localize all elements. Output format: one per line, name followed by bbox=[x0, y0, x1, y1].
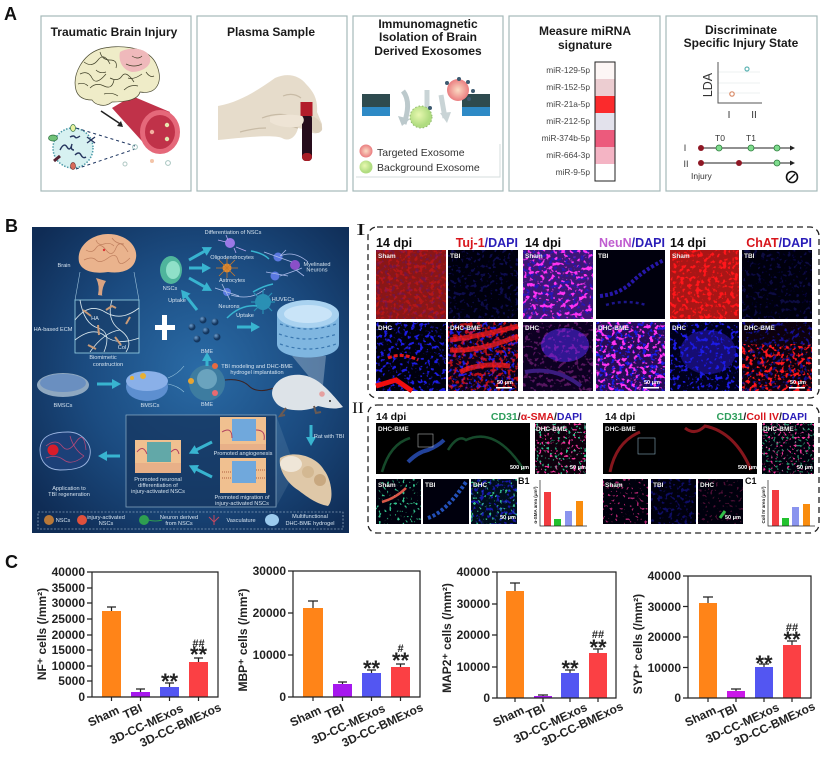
micrograph: DHC alpha-SMA: DHC bbox=[473, 482, 487, 489]
icon: brain with vessel and exosome bbox=[48, 47, 180, 170]
chart: SYP+ cells: 0 bbox=[674, 691, 681, 705]
panel label: B: B bbox=[5, 216, 18, 236]
chart: MBP+ cells: 10000 bbox=[253, 648, 286, 662]
label: C1: C1 bbox=[745, 476, 757, 486]
labels: schematic text: Myelinated bbox=[303, 262, 331, 268]
scatter plot: LDA bbox=[701, 62, 762, 121]
micrograph: ChAT Sham: Sham bbox=[672, 253, 690, 260]
heatmap: miRNA: miR-212-5p bbox=[546, 116, 590, 126]
heatmap: miRNA: miR-664-3p bbox=[546, 150, 590, 160]
chart: MAP2+ cells: 10000 bbox=[457, 660, 490, 674]
micrograph: TBI alpha-SMA bbox=[423, 479, 469, 524]
labels: schematic text: BME bbox=[201, 402, 213, 408]
chart: MAP2+ cells: MAP2⁺ cells (/mm²) bbox=[440, 583, 454, 693]
chart: MBP+ cells: ** bbox=[363, 656, 380, 681]
micrograph: DHC alpha-SMA bbox=[471, 479, 517, 524]
chart: SYP+ cells: ** bbox=[783, 627, 801, 652]
chart: NF+ cells: 25000 bbox=[52, 612, 85, 626]
chart: NF+ cells: 15000 bbox=[52, 643, 85, 657]
timeline: injury states: T1 bbox=[746, 133, 756, 143]
labels: schematic text: differentiation of bbox=[138, 483, 178, 489]
heading: NeuN bbox=[525, 236, 665, 250]
timeline: injury states: II bbox=[683, 159, 689, 169]
heading: Tuj-1: Tuj-1/DAPI bbox=[456, 236, 518, 250]
heatmap: miRNA: miR-21a-5p bbox=[546, 99, 590, 109]
box: Measure miRNA signature: Measure miRNA bbox=[539, 24, 631, 38]
timeline: injury states bbox=[683, 133, 798, 182]
micrograph: wide DHC-BME alpha-SMA: DHC-BME bbox=[378, 426, 409, 433]
box: Plasma Sample: Plasma Sample bbox=[227, 25, 315, 39]
chart: NF+ cells: 10000 bbox=[52, 659, 85, 673]
heading: Coll IV: CD31/Coll IV/DAPI bbox=[717, 411, 807, 423]
micrograph: TBI Coll IV: TBI bbox=[653, 482, 664, 489]
chart: MAP2+ cells: ## bbox=[592, 629, 604, 641]
illustration: BMSC dish and BME bbox=[37, 363, 274, 401]
chart: MBP+ cells: MBP⁺ cells (/mm²) bbox=[236, 588, 250, 692]
labels: schematic text: Oligodendrocytes bbox=[210, 255, 254, 261]
labels: schematic text: NSCs bbox=[163, 286, 178, 292]
heading: alpha-SMA: CD31/α-SMA/DAPI bbox=[491, 411, 582, 423]
chart: MAP2+ cells: 40000 bbox=[457, 565, 490, 579]
micrograph: DHC Coll IV: 50 μm bbox=[725, 515, 741, 521]
micrograph: zoom DHC-BME Coll IV: DHC-BME bbox=[763, 426, 794, 433]
micrograph: zoom DHC-BME alpha-SMA bbox=[535, 423, 586, 474]
chart: NF+ cells: 30000 bbox=[52, 596, 85, 610]
scatter plot: LDA: I bbox=[728, 110, 730, 121]
micrograph: NeuN Sham: Sham bbox=[525, 253, 543, 260]
chart: SYP+ cells: ** bbox=[755, 651, 773, 676]
panel I: 14 dpi neuronal staining bbox=[368, 227, 819, 398]
chart: MBP+ cells: 3D-CC-BMExos bbox=[340, 700, 426, 750]
legend: exosome types: Background Exosome bbox=[377, 162, 480, 174]
illustration: brain and ECM bbox=[75, 234, 139, 353]
labels: schematic text: Col bbox=[118, 345, 126, 351]
chart: MBP+ cells: 20000 bbox=[253, 606, 286, 620]
icon: plus sign bbox=[155, 315, 175, 340]
chart: SYP+ cells: TBI bbox=[716, 701, 739, 722]
micrograph: DHC Coll IV bbox=[698, 479, 743, 524]
roman numeral I: I bbox=[356, 221, 366, 239]
box: Discriminate Specific Injury State: Discriminate bbox=[705, 23, 777, 37]
labels: schematic text: Uptake bbox=[236, 313, 254, 319]
box: Measure miRNA signature: signature bbox=[558, 38, 612, 52]
micrograph: ChAT DHC-BME: DHC-BME bbox=[744, 325, 775, 332]
chart: SYP+ cells: 40000 bbox=[648, 569, 681, 583]
labels: schematic text: BME bbox=[201, 349, 213, 355]
chart: MBP+ cells: 3D-CC-MExos bbox=[309, 701, 388, 747]
chart: SYP+ cells bbox=[631, 569, 818, 749]
micrograph: wide DHC-BME Coll IV bbox=[603, 423, 757, 474]
legend: schematic key: NSCs bbox=[99, 521, 114, 527]
labels: schematic text bbox=[34, 230, 345, 507]
panel A: exosome workflow bbox=[41, 16, 817, 191]
micrograph: Tuj-1 DHC: DHC bbox=[378, 325, 392, 332]
micrograph: Tuj-1 Sham: Sham bbox=[378, 253, 396, 260]
labels: schematic text: HA bbox=[91, 316, 99, 322]
scatter plot: LDA: LDA bbox=[701, 72, 715, 97]
illustration: rat bbox=[272, 375, 343, 416]
micrograph: Sham Coll IV bbox=[603, 479, 648, 524]
diagram: magnets and exosomes bbox=[362, 77, 490, 128]
bar chart: alpha-SMA area bbox=[533, 480, 587, 526]
panel II: 14 dpi vascular staining bbox=[368, 405, 819, 533]
chart: NF+ cells: 35000 bbox=[52, 581, 85, 595]
labels: schematic text: BMSCs bbox=[54, 403, 73, 409]
box: Traumatic Brain Injury bbox=[41, 16, 191, 191]
chart: MAP2+ cells: TBI bbox=[524, 701, 547, 722]
chart: MAP2+ cells: 0 bbox=[483, 691, 490, 705]
bar chart: Coll IV area: Coll IV area (μm²) bbox=[761, 486, 766, 524]
legend: schematic key: DHC-BME hydrogel bbox=[285, 521, 335, 527]
illustration: BME particles bbox=[188, 316, 220, 342]
micrograph: DHC alpha-SMA: 50 μm bbox=[500, 515, 516, 521]
panel label: C: C bbox=[5, 552, 18, 572]
micrograph: ChAT DHC-BME bbox=[742, 322, 812, 391]
inset: promoted outcomes bbox=[126, 415, 296, 507]
labels: schematic text: Brain bbox=[57, 263, 71, 269]
labels: schematic text: Differentiation of NSCs bbox=[205, 230, 262, 236]
heading: NeuN: 14 dpi bbox=[525, 236, 561, 250]
micrograph: NeuN DHC-BME: DHC-BME bbox=[598, 325, 629, 332]
micrograph: NeuN DHC bbox=[523, 322, 593, 391]
labels: schematic text: Neurons bbox=[218, 304, 240, 310]
illustration: regenerated brain bbox=[40, 432, 90, 470]
legend: schematic key bbox=[38, 512, 343, 529]
legend: schematic key: injury-activated bbox=[87, 515, 125, 521]
panel label: A: A bbox=[4, 4, 17, 24]
micrograph: Sham alpha-SMA: Sham bbox=[378, 482, 396, 489]
labels: schematic text: TBI regeneration bbox=[48, 492, 90, 498]
chart: SYP+ cells: Sham bbox=[683, 703, 718, 730]
micrograph: NeuN Sham bbox=[523, 250, 593, 319]
labels: schematic text: Promoted migration of bbox=[214, 495, 270, 501]
chart: NF+ cells: ** bbox=[190, 642, 207, 667]
micrograph: NeuN DHC: DHC bbox=[525, 325, 539, 332]
panel B: hydrogel schematic bbox=[32, 227, 349, 533]
chart: MAP2+ cells: 3D-CC-MExos bbox=[511, 700, 590, 746]
chart: SYP+ cells: 30000 bbox=[648, 600, 681, 614]
timeline: injury states: T0 bbox=[715, 133, 725, 143]
legend: schematic key: Multifunctional bbox=[292, 514, 328, 520]
labels: schematic text: HUVECs bbox=[272, 297, 294, 303]
illustration: DHC-BME hydrogel bbox=[277, 300, 339, 385]
chart: MBP+ cells: ** bbox=[392, 648, 409, 673]
scatter plot: LDA: II bbox=[751, 110, 757, 121]
chart: MBP+ cells: # bbox=[397, 643, 404, 655]
chart: SYP+ cells: 3D-CC-MExos bbox=[703, 700, 782, 746]
heading: ChAT bbox=[670, 236, 812, 250]
chart: NF+ cells: ## bbox=[192, 638, 205, 650]
chart: SYP+ cells: 20000 bbox=[648, 630, 681, 644]
chart: NF+ cells: Sham bbox=[86, 703, 121, 730]
micrograph: wide DHC-BME alpha-SMA: 500 μm bbox=[510, 465, 529, 471]
micrograph: Tuj-1 DHC-BME: 50 μm bbox=[497, 380, 513, 386]
micrograph: Sham alpha-SMA bbox=[376, 479, 421, 524]
legend: schematic key: Vasculature bbox=[226, 518, 256, 524]
box: Immunomagnetic Isolation: Isolation of Brain bbox=[379, 30, 477, 44]
micrograph: zoom DHC-BME Coll IV bbox=[762, 423, 814, 474]
labels: schematic text: HA-based ECM bbox=[34, 327, 73, 333]
chart: NF+ cells: 5000 bbox=[58, 674, 85, 688]
heatmap: miRNA: miR-9-5p bbox=[556, 167, 590, 177]
labels: schematic text: Promoted neuronal bbox=[134, 477, 182, 483]
micrograph: zoom DHC-BME alpha-SMA: 50 μm bbox=[570, 465, 586, 471]
icon: gloved hand holding blood tube bbox=[218, 75, 322, 161]
chart: MAP2+ cells: Sham bbox=[491, 703, 526, 730]
chart: MAP2+ cells: 3D-CC-BMExos bbox=[540, 699, 626, 749]
heading: alpha-SMA: 14 dpi bbox=[376, 411, 406, 423]
labels: schematic text: TBI modeling and DHC-BME bbox=[221, 364, 293, 370]
labels: schematic text: Rat with TBI bbox=[314, 434, 345, 440]
micrograph: Tuj-1 TBI: TBI bbox=[450, 253, 461, 260]
legend: schematic key: NSCs bbox=[56, 518, 71, 524]
micrograph: ChAT Sham bbox=[670, 250, 739, 319]
chart: MAP2+ cells: ** bbox=[561, 656, 579, 681]
chart: NF+ cells: 20000 bbox=[52, 628, 85, 642]
roman numeral II: II bbox=[352, 399, 364, 417]
micrograph: TBI Coll IV bbox=[651, 479, 696, 524]
legend: exosome types: Targeted Exosome bbox=[377, 147, 465, 159]
chart: NF+ cells: NF⁺ cells (/mm²) bbox=[35, 588, 49, 680]
micrograph: ChAT TBI bbox=[742, 250, 812, 319]
micrograph: ChAT DHC-BME: 50 μm bbox=[790, 380, 806, 386]
micrograph: wide DHC-BME Coll IV: 500 μm bbox=[738, 465, 757, 471]
legend: schematic key: from NSCs bbox=[165, 521, 193, 527]
heading: ChAT: ChAT/DAPI bbox=[746, 236, 812, 250]
heading: Tuj-1: 14 dpi bbox=[376, 236, 412, 250]
chart: SYP+ cells: ## bbox=[786, 622, 798, 634]
chart: MBP+ cells: TBI bbox=[323, 701, 346, 722]
timeline: injury states: I bbox=[684, 143, 686, 153]
micrograph: Tuj-1 DHC-BME: DHC-BME bbox=[450, 325, 481, 332]
micrograph: ChAT DHC: DHC bbox=[672, 325, 686, 332]
chart: MAP2+ cells bbox=[440, 565, 626, 749]
micrograph: DHC Coll IV: DHC bbox=[700, 482, 714, 489]
micrograph: NeuN TBI: TBI bbox=[598, 253, 609, 260]
micrograph: Tuj-1 DHC-BME bbox=[448, 322, 518, 391]
heatmap: miRNA: miR-152-5p bbox=[546, 82, 590, 92]
heading: Coll IV: 14 dpi bbox=[605, 411, 635, 423]
micrograph: NeuN DHC-BME bbox=[596, 322, 665, 391]
bar chart: Coll IV area bbox=[761, 480, 815, 526]
arrows: cyan flow bbox=[97, 251, 311, 477]
chart: NF+ cells bbox=[35, 565, 224, 750]
box: Immunomagnetic Isolation: Immunomagnetic bbox=[378, 17, 478, 31]
label: B1: B1 bbox=[518, 476, 530, 486]
labels: schematic text: Biomimetic bbox=[89, 355, 117, 361]
micrograph: Sham Coll IV: Sham bbox=[605, 482, 623, 489]
chart: NF+ cells: TBI bbox=[121, 701, 144, 722]
chart: MAP2+ cells: 30000 bbox=[457, 597, 490, 611]
heading: alpha-SMA bbox=[376, 411, 582, 423]
labels: schematic text: BMSCs bbox=[141, 403, 160, 409]
micrograph: NeuN TBI bbox=[596, 250, 665, 319]
micrograph: zoom DHC-BME alpha-SMA: DHC-BME bbox=[536, 426, 567, 433]
micrograph: Tuj-1 Sham bbox=[376, 250, 446, 319]
labels: schematic text: Promoted angiogenesis bbox=[214, 451, 273, 457]
chart: NF+ cells: ** bbox=[161, 669, 178, 694]
chart: NF+ cells: 0 bbox=[78, 690, 85, 704]
heading: Coll IV bbox=[605, 411, 807, 423]
micrograph: ChAT TBI: TBI bbox=[744, 253, 755, 260]
micrograph: TBI alpha-SMA: TBI bbox=[425, 482, 436, 489]
legend: exosome types bbox=[356, 144, 500, 177]
illustration: NSCs and differentiated cells bbox=[160, 235, 308, 314]
heading: NeuN: NeuN/DAPI bbox=[599, 236, 665, 250]
heatmap: miRNA: miR-374b-5p bbox=[542, 133, 590, 143]
heading: Tuj-1 bbox=[376, 236, 518, 250]
chart: SYP+ cells: 3D-CC-BMExos bbox=[732, 699, 818, 749]
chart: MAP2+ cells: ** bbox=[589, 635, 607, 660]
box: Traumatic Brain Injury: Traumatic Brain Injury bbox=[51, 25, 178, 39]
heatmap: miRNA: miR-129-5p bbox=[546, 65, 590, 75]
box: Plasma Sample bbox=[197, 16, 347, 191]
legend: schematic key: Neuron derived bbox=[160, 515, 198, 521]
micrograph: zoom DHC-BME Coll IV: 50 μm bbox=[797, 465, 813, 471]
micrograph: NeuN DHC-BME: 50 μm bbox=[644, 380, 660, 386]
chart: SYP+ cells: SYP⁺ cells (/mm²) bbox=[631, 594, 645, 694]
heatmap: miRNA bbox=[542, 62, 615, 181]
bar chart: alpha-SMA area: α-SMA area (μm²) bbox=[533, 486, 538, 524]
tissue blocks bbox=[135, 417, 266, 493]
labels: schematic text: construction bbox=[93, 362, 123, 368]
illustration: rat brain bbox=[280, 454, 331, 506]
chart: NF+ cells: 3D-CC-MExos bbox=[107, 701, 186, 747]
box: Immunomagnetic Isolation: Derived Exosomes bbox=[374, 44, 482, 58]
labels: schematic text: injury-activated NSCs bbox=[215, 501, 269, 507]
box: Discriminate Specific Injury State: Specific Injury State bbox=[684, 36, 799, 50]
timeline: injury states: Injury bbox=[691, 171, 713, 181]
chart: MBP+ cells: 30000 bbox=[253, 564, 286, 578]
micrograph: wide DHC-BME Coll IV: DHC-BME bbox=[605, 426, 636, 433]
chart: NF+ cells: 3D-CC-BMExos bbox=[138, 700, 224, 750]
micrograph: wide DHC-BME alpha-SMA bbox=[376, 423, 530, 474]
labels: schematic text: Uptake bbox=[168, 298, 186, 304]
chart: MBP+ cells: 0 bbox=[279, 690, 286, 704]
labels: schematic text: Application to bbox=[52, 486, 86, 492]
micrograph: Tuj-1 TBI bbox=[448, 250, 518, 319]
box: Immunomagnetic Isolation bbox=[353, 16, 503, 191]
chart: SYP+ cells: 10000 bbox=[648, 661, 681, 675]
chart: MBP+ cells: Sham bbox=[288, 703, 323, 730]
box: Measure miRNA signature bbox=[509, 16, 660, 191]
micrograph: ChAT DHC bbox=[670, 322, 739, 391]
box: Discriminate Specific Injury State bbox=[666, 16, 817, 191]
micrograph: Tuj-1 DHC bbox=[376, 322, 446, 391]
labels: schematic text: hydrogel implantation bbox=[230, 370, 284, 376]
labels: schematic text: injury-activated NSCs bbox=[131, 489, 185, 495]
chart: MBP+ cells bbox=[236, 564, 426, 750]
labels: schematic text: Astrocytes bbox=[219, 278, 245, 284]
chart: MAP2+ cells: 20000 bbox=[457, 628, 490, 642]
labels: schematic text: Neurons bbox=[306, 268, 328, 274]
heading: ChAT: 14 dpi bbox=[670, 236, 706, 250]
chart: NF+ cells: 40000 bbox=[52, 565, 85, 579]
